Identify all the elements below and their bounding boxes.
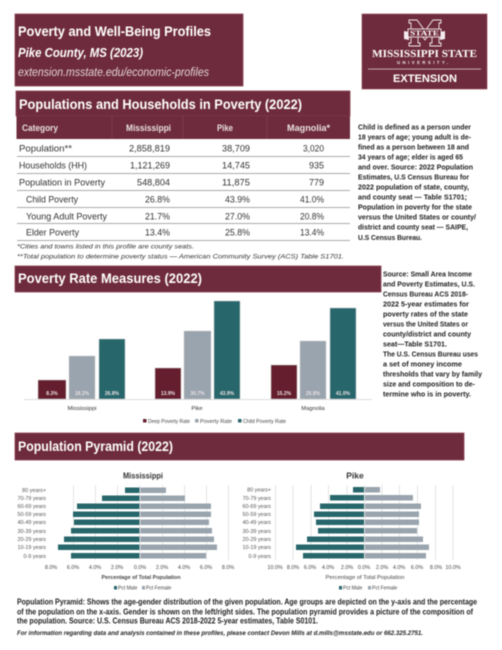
chart: Mississippi pyramid: 0-9 years xyxy=(24,554,46,560)
poverty table: 11,875 xyxy=(222,178,250,188)
poverty table: 935 xyxy=(309,160,324,172)
chart: Pike pyramid: 80 years+ xyxy=(247,488,271,494)
poverty table xyxy=(16,116,350,240)
chart: Pike pyramid: Percentage of Total Population xyxy=(326,575,404,581)
text block: definitions and sources: and over. Source: 2022 Population xyxy=(358,162,473,172)
poverty table: Category xyxy=(22,123,58,133)
chart: Mississippi pyramid: 10-19 years xyxy=(18,545,46,551)
chart: Mississippi pyramid: 60-69 years xyxy=(18,504,46,510)
chart: Pike pyramid: 4.0% xyxy=(393,565,405,571)
text block: definitions and sources: Child is defined as a person under xyxy=(358,122,471,132)
chart: Mississippi pyramid: Percentage of Total Population xyxy=(102,575,181,581)
heading: Populations and Households in Poverty (2022) xyxy=(19,97,302,112)
chart: Mississippi pyramid: 8.0% xyxy=(45,565,57,571)
text block: definitions and sources: versus the United States or county/ xyxy=(358,212,476,222)
poverty table: 14,745 xyxy=(222,160,250,172)
poverty table: Mississippi xyxy=(126,123,171,133)
chart: Pike pyramid: 8.0% xyxy=(287,565,299,571)
poverty table: 38,709 xyxy=(222,144,250,154)
bars: Pike: Pike xyxy=(191,406,203,412)
chart: Mississippi pyramid: 2.0% xyxy=(111,565,123,571)
text block: poverty rate sources: Source: Small Area Income xyxy=(383,270,472,278)
chart: Pike pyramid: 4.0% xyxy=(322,565,334,571)
table footnotes xyxy=(17,244,344,260)
poverty table: 548,804 xyxy=(137,178,170,188)
poverty table: Elder Poverty xyxy=(26,228,79,238)
chart: Mississippi pyramid: 70-79 years xyxy=(18,496,46,502)
chart: Mississippi pyramid: Pct Male xyxy=(118,586,138,592)
chart: Mississippi pyramid: 6.0% xyxy=(200,565,212,571)
chart: Mississippi pyramid: 0.0% xyxy=(134,565,146,571)
bars: Mississippi xyxy=(38,339,125,412)
chart: Mississippi pyramid: 4.0% xyxy=(178,565,190,571)
text block: poverty rate sources: 2022 5-year estimates for xyxy=(383,300,469,308)
chart legend xyxy=(143,419,286,425)
poverty table: Magnolia* xyxy=(287,123,331,133)
bars: Magnolia: 41.0% xyxy=(336,391,351,397)
text block: poverty rate sources: poverty rates of the state xyxy=(383,310,468,318)
heading: Population Pyramid (2022) xyxy=(18,439,173,454)
text block: poverty rate sources: a set of money income xyxy=(383,360,462,368)
chart: Mississippi pyramid: 2.0% xyxy=(156,565,168,571)
chart: Mississippi pyramid: 40-49 years xyxy=(18,520,46,526)
text block: definitions and sources: 18 years of age; young adult is de- xyxy=(358,132,472,142)
chart: Pike pyramid: 10.0% xyxy=(445,565,461,571)
text block: poverty rate sources: termine who is in poverty. xyxy=(383,390,471,398)
text block: population pyramid explanation: the population. Source: U.S. Census Bureau ACS 2018-2022 5-year estimates, Table S0101. xyxy=(17,616,318,626)
poverty table: Population** xyxy=(19,144,72,154)
chart: Pike pyramid: 10.0% xyxy=(267,565,283,571)
text block: poverty rate sources xyxy=(383,270,483,398)
text block: poverty rate sources: Census Bureau ACS 2018- xyxy=(383,290,468,298)
chart: Pike pyramid: 2.0% xyxy=(341,565,353,571)
text block: poverty rate sources: and Poverty Estimates, U.S. xyxy=(383,280,475,288)
heading: Poverty Rate Measures (2022) xyxy=(18,271,202,286)
chart: Mississippi pyramid: 30-39 years xyxy=(18,529,46,535)
bars: Magnolia: 15.2% xyxy=(277,391,292,397)
logo wordmark: MISSISSIPPI STATE xyxy=(372,49,477,60)
panel: poverty rate measures xyxy=(15,266,381,425)
chart: Pike pyramid: 6.0% xyxy=(411,565,423,571)
text block: definitions and sources: Estimates, U.S Census Bureau for xyxy=(358,172,469,182)
logo: Mississippi State University Extension xyxy=(362,14,487,89)
chart: Mississippi pyramid: 20-29 years xyxy=(18,537,46,543)
heading xyxy=(16,91,350,116)
chart: Pike pyramid: 70-79 years xyxy=(243,496,271,502)
panel: populations and households in poverty xyxy=(16,91,350,260)
chart: Pike pyramid: 2.0% xyxy=(376,565,388,571)
bars: Pike: 30.7% xyxy=(190,391,205,397)
poverty table: 41.0% xyxy=(300,194,324,206)
chart legend: Poverty Rate xyxy=(200,419,232,425)
text block: definitions and sources: district and county seat — SAIPE, xyxy=(358,222,468,232)
chart legend: Deep Poverty Rate xyxy=(148,419,190,425)
table footnotes: *Cities and towns listed in this profile are county seats. xyxy=(17,244,194,250)
poverty table: 43.9% xyxy=(225,194,251,206)
chart: Mississippi pyramid: 50-59 years xyxy=(18,512,46,518)
text block: poverty rate sources: versus the United States or xyxy=(383,320,468,328)
poverty table: 2,858,819 xyxy=(129,144,170,154)
poverty table: 21.7% xyxy=(145,212,171,222)
chart: Mississippi pyramid: Mississippi xyxy=(123,470,163,480)
bars: Pike: 43.9% xyxy=(220,391,235,397)
chart: Mississippi pyramid: 4.0% xyxy=(89,565,101,571)
text block: definitions and sources: fined as a person between 18 and xyxy=(358,142,469,152)
bars: Pike xyxy=(155,301,240,412)
poverty table: 13.4% xyxy=(145,228,171,238)
text block: definitions and sources: 34 years of age; elder is aged 65 xyxy=(358,152,463,162)
icon: M emblem: STATE xyxy=(410,30,439,38)
poverty table: Young Adult Poverty xyxy=(26,212,107,222)
chart: Mississippi pyramid: 6.0% xyxy=(67,565,79,571)
logo university line: UNIVERSITY. xyxy=(397,60,448,65)
chart: Pike pyramid: 30-39 years xyxy=(243,529,271,535)
chart: Pike pyramid: 20-29 years xyxy=(243,537,271,543)
chart: Pike pyramid: 60-69 years xyxy=(243,504,271,510)
text block: definitions and sources xyxy=(358,122,476,242)
header panel xyxy=(15,14,243,86)
text block: poverty rate sources: county/district and county xyxy=(383,330,472,338)
poverty table: 27.0% xyxy=(225,212,251,222)
chart: Pike pyramid: Pct Female xyxy=(372,586,398,592)
poverty table: Households (HH) xyxy=(19,160,87,172)
poverty table: 13.4% xyxy=(300,228,324,238)
bars: Mississippi: 18.2% xyxy=(75,391,90,397)
text block: population pyramid explanation xyxy=(17,598,477,626)
bars: Magnolia: 25.8% xyxy=(306,391,321,397)
bars: Mississippi: 8.3% xyxy=(46,391,58,397)
table footnotes: **Total population to determine poverty status — American Community Survey (ACS) Table S1701. xyxy=(17,254,344,260)
bars: Mississippi: Mississippi xyxy=(68,406,96,412)
chart: Pike pyramid: 8.0% xyxy=(430,565,442,571)
chart: Mississippi pyramid xyxy=(18,470,234,592)
chart: Pike pyramid: Pike xyxy=(346,470,364,480)
poverty table: 1,121,269 xyxy=(130,160,170,172)
logo extension line: EXTENSION xyxy=(393,73,457,85)
chart: Pike pyramid: 40-49 years xyxy=(243,520,271,526)
text block: definitions and sources: Population in poverty for the state xyxy=(358,202,472,212)
chart: Pike pyramid: 0-9 years xyxy=(249,554,271,560)
title: Poverty and Well-Being Profiles xyxy=(18,23,211,39)
chart: Mississippi pyramid: Pct Female xyxy=(146,586,172,592)
poverty table: Child Poverty xyxy=(26,194,78,206)
chart legend: Child Poverty Rate xyxy=(243,419,286,425)
chart: Pike pyramid: 0.0% xyxy=(358,565,370,571)
poverty table: 26.8% xyxy=(145,194,171,206)
text block: poverty rate sources: thresholds that vary by family xyxy=(383,370,483,378)
chart: Pike pyramid: 10-19 years xyxy=(243,545,271,551)
chart: Pike pyramid: Pct Male xyxy=(343,586,363,592)
chart: Mississippi pyramid: 80 years+ xyxy=(22,488,46,494)
bars: Magnolia xyxy=(271,308,356,412)
poverty table: 20.8% xyxy=(300,212,324,222)
bars: Mississippi: 26.8% xyxy=(105,391,120,397)
chart: Pike pyramid: 6.0% xyxy=(304,565,316,571)
text block: poverty rate sources: seat—Table S1701. xyxy=(383,340,447,348)
text block: poverty rate sources: The U.S. Census Bureau uses xyxy=(383,350,478,358)
chart: Mississippi pyramid: 8.0% xyxy=(222,565,234,571)
bars: Pike: 13.9% xyxy=(161,391,176,397)
subtitle: county and year: Pike County, MS (2023) xyxy=(18,46,143,60)
poverty table: Population in Poverty xyxy=(19,178,105,188)
text block: definitions and sources: 2022 population of state, county, xyxy=(358,182,469,192)
poverty table: 779 xyxy=(309,178,324,188)
bar chart: poverty rates xyxy=(24,301,372,425)
website link: extension.msstate.edu/economic-profiles xyxy=(18,67,209,79)
bars: Magnolia: Magnolia xyxy=(301,406,326,412)
chart: Pike pyramid: 50-59 years xyxy=(243,512,271,518)
text block: poverty rate sources: size and composition to de- xyxy=(383,380,475,388)
poverty table: 3,020 xyxy=(303,144,324,154)
chart: Pike pyramid xyxy=(243,470,461,592)
poverty table: 25.8% xyxy=(225,228,251,238)
panel: population pyramid xyxy=(15,433,464,592)
text block: definitions and sources: U.S Census Bureau. xyxy=(358,233,422,242)
contact note: For information regarding data and analysis contained in these profiles, please contact Devon Mills at d.mills@msstate.edu or 662.325.2751. xyxy=(17,630,423,637)
poverty table: Pike xyxy=(217,123,233,133)
heading xyxy=(15,266,381,292)
heading xyxy=(15,433,464,460)
text block: definitions and sources: and county seat — Table S1701; xyxy=(358,192,467,202)
